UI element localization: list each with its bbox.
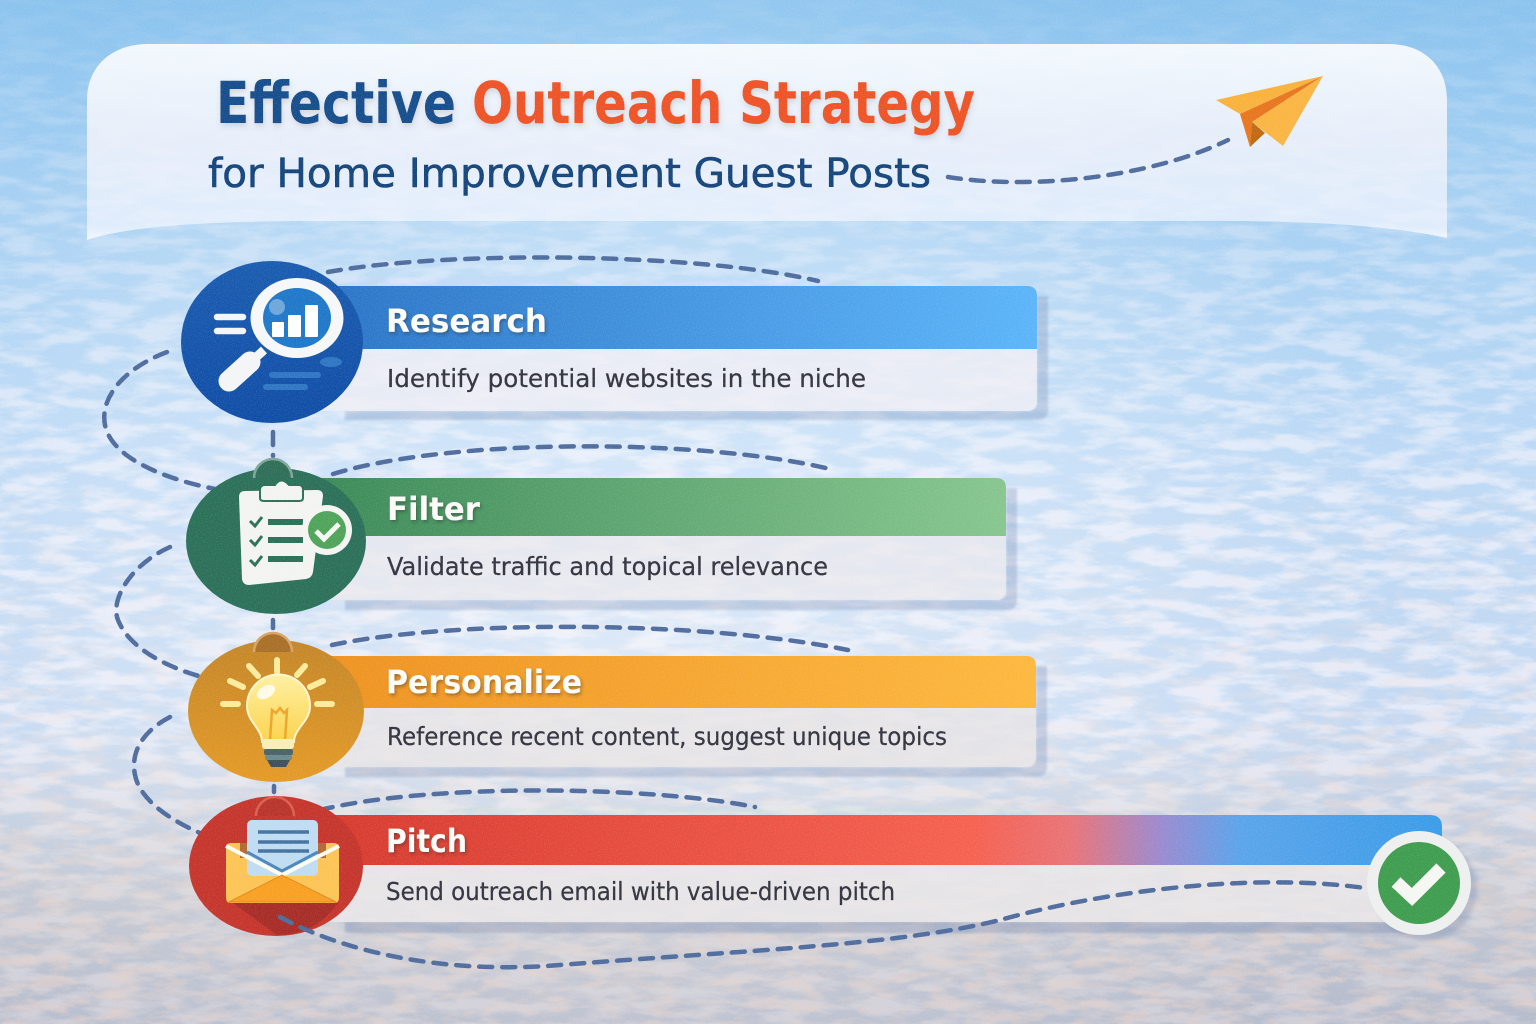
filter body [320, 536, 1006, 600]
dashed connector: pitch to completion [280, 882, 1365, 967]
step: Personalize [320, 656, 1047, 777]
title dashed trail [948, 140, 1228, 182]
pitch header [320, 815, 1442, 865]
icon: personalize lightbulb [188, 632, 364, 782]
research body [320, 349, 1037, 411]
icon: filter clipboard [186, 458, 366, 614]
personalize body [320, 708, 1036, 767]
title line: Effective [216, 69, 456, 137]
title banner [87, 44, 1447, 240]
subtitle: for Home Improvement Guest Posts [208, 151, 931, 197]
step: Research [320, 286, 1048, 420]
filter description: Validate traffic and topical relevance [387, 552, 828, 581]
pitch heading: Pitch [386, 822, 467, 860]
personalize heading: Personalize [386, 663, 582, 701]
icon: pitch envelope [189, 796, 363, 936]
icon: research magnifier [181, 261, 363, 423]
step: Pitch [320, 815, 1442, 933]
personalize description: Reference recent content, suggest unique topics [387, 722, 947, 751]
step: Filter [320, 478, 1017, 610]
dashed connectors [104, 257, 848, 833]
filter header [320, 478, 1006, 536]
pitch body [320, 865, 1442, 922]
personalize header [320, 656, 1036, 708]
research heading: Research [386, 302, 547, 340]
title line: Outreach Strategy [472, 69, 975, 137]
research description: Identify potential websites in the niche [387, 364, 866, 393]
research header [320, 286, 1037, 349]
icon: paper plane [1216, 76, 1323, 147]
pitch description: Send outreach email with value-driven pitch [386, 877, 895, 906]
filter heading: Filter [387, 490, 480, 528]
icon: completion check badge [1367, 831, 1477, 941]
